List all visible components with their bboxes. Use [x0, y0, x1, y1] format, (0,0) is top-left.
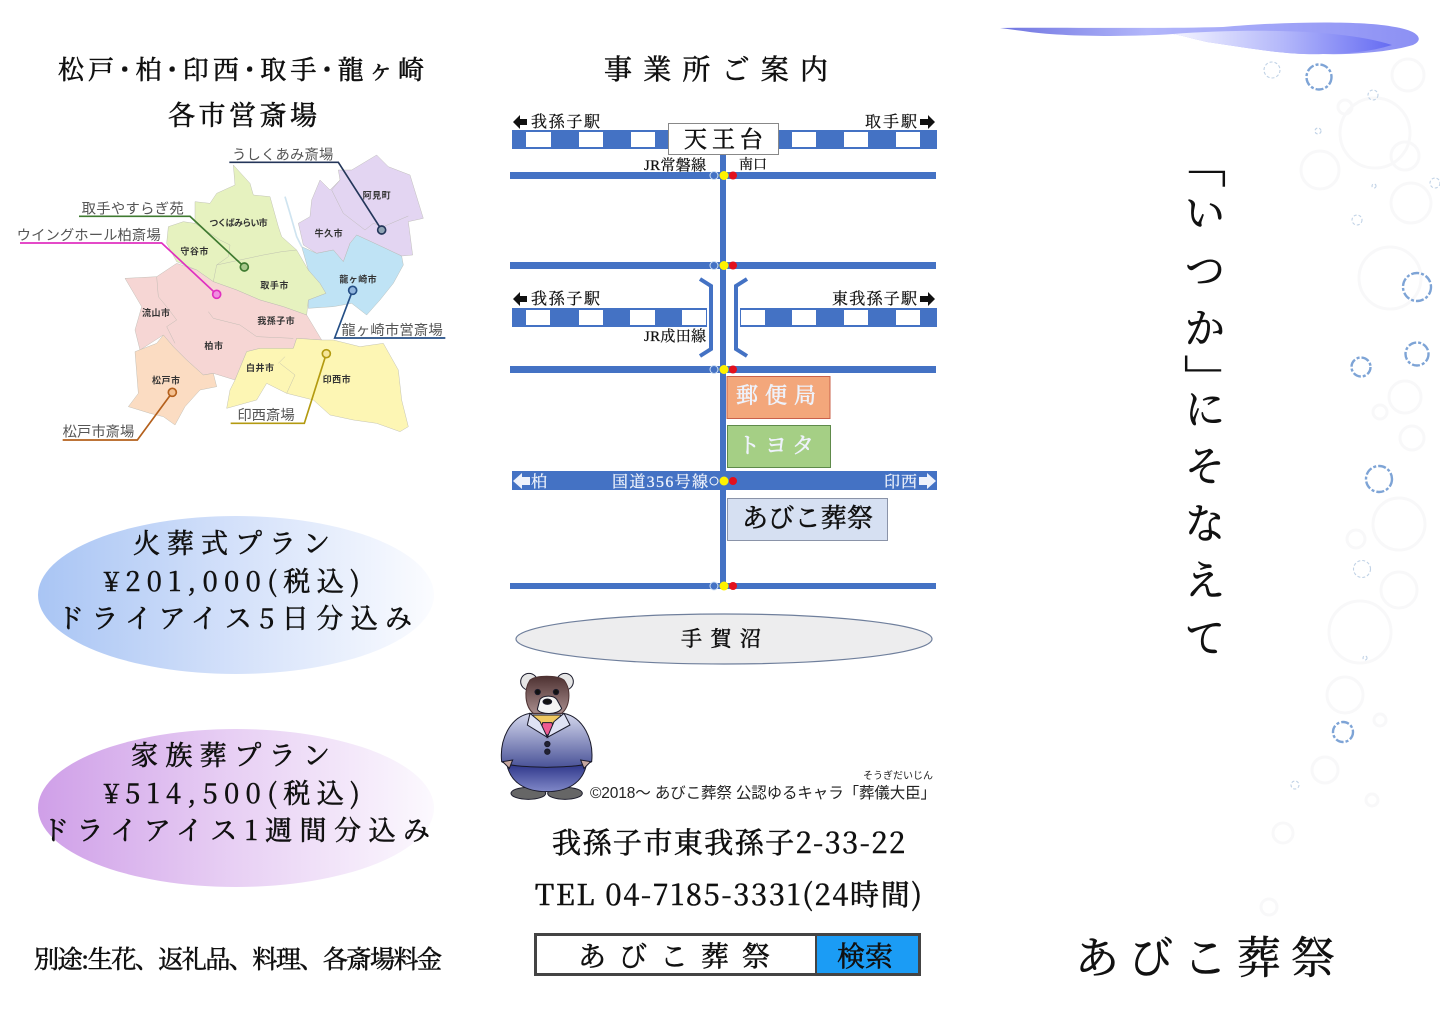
city names: 我孫子市: [257, 315, 295, 326]
label: うしくあみ斎場: [229, 147, 386, 234]
plan: family funeral: ドライアイス1週間分込み: [42, 809, 430, 848]
vertical tagline: 「: [1165, 138, 1237, 188]
label: 取手やすらぎ苑: 取手やすらぎ苑: [82, 200, 184, 217]
heading: crematoria: 松戸･柏･印西･取手･龍ヶ崎: [58, 50, 424, 87]
direction labels: JR成田線: [644, 328, 706, 345]
vertical tagline: いつか: [1175, 191, 1235, 364]
direction labels: 取手駅: [865, 109, 917, 132]
label: 印西斎場: [231, 350, 330, 424]
lake: 手賀沼: 手賀沼: [681, 623, 761, 653]
city names: 白井市: [246, 362, 274, 373]
city names: 取手市: [260, 280, 288, 291]
decorative bubbles: [1261, 59, 1440, 915]
city names: [142, 191, 391, 386]
city names: 阿見町: [363, 191, 391, 201]
landmark: Toyota: [728, 426, 830, 468]
telephone: TEL 04-7185-3331(24時間): [535, 873, 922, 914]
search box: 検索: [837, 935, 893, 975]
mascot: bear in suit: [501, 673, 592, 799]
city names: 牛久市: [315, 227, 343, 238]
landmark: Abiko Sosai: あびこ葬祭: [742, 498, 873, 535]
plan: cremation: 火葬式プラン: [133, 522, 330, 561]
city names: 印西市: [323, 373, 351, 384]
heading: office guide: 事業所ご案内: [604, 48, 828, 88]
label: うしくあみ斎場: うしくあみ斎場: [232, 147, 333, 164]
mascot caption: そうぎだいじん: [863, 769, 933, 782]
brand name: あびこ葬祭: [1075, 922, 1335, 986]
direction labels: JR常磐線: [644, 157, 706, 174]
city names: 柏市: [204, 340, 223, 351]
plan: family funeral: [38, 729, 434, 887]
mascot caption: [590, 769, 936, 802]
plan: cremation: [38, 516, 434, 674]
vertical tagline: [1165, 138, 1245, 673]
route 356 labels: 国道356号線: [612, 473, 708, 491]
city names: 流山市: [142, 307, 170, 318]
landmark: post office: [727, 376, 830, 418]
route map: [510, 109, 937, 664]
note: separate charges: 別途:生花、返礼品、料理、各斎場料金: [34, 940, 442, 976]
city names: 龍ヶ崎市: [339, 274, 377, 285]
city names: 守谷市: [180, 246, 208, 257]
search box: あびこ葬祭: [578, 935, 770, 975]
label: 印西斎場: 印西斎場: [237, 407, 295, 424]
heading: crematoria: 各市営斎場: [168, 94, 317, 133]
label: 龍ヶ崎市営斎場: 龍ヶ崎市営斎場: [341, 322, 443, 339]
direction labels: 我孫子駅: [531, 109, 600, 132]
label: 松戸市斎場: [63, 388, 176, 441]
roads: [510, 150, 937, 589]
address: 我孫子市東我孫子2-33-22: [552, 821, 905, 862]
heading: crematoria: [58, 50, 424, 133]
route 356 labels: 柏: [531, 469, 547, 492]
lake: 手賀沼: [516, 614, 932, 664]
plan: family funeral: ¥514,500(税込): [103, 772, 360, 811]
mascot caption: ©2018～ あびこ葬祭 公認ゆるキャラ「葬儀大臣」: [590, 784, 936, 802]
station: 天王台: 天王台: [684, 121, 763, 154]
search box: [536, 934, 920, 975]
city names: つくばみらい市: [209, 217, 268, 228]
plan: cremation: ¥201,000(税込): [103, 560, 360, 599]
vertical tagline: にそなえて: [1175, 387, 1235, 673]
direction labels: [513, 109, 935, 345]
map regions: [125, 155, 423, 432]
city names: 松戸市: [152, 375, 180, 386]
decorative swoosh: [1000, 22, 1419, 54]
map: city areas and crematoria: [17, 147, 445, 441]
direction labels: 東我孫子駅: [832, 286, 917, 309]
landmark: post office: 郵便局: [736, 379, 816, 410]
JR Joban line: [512, 130, 937, 149]
label: 龍ヶ崎市営斎場: [335, 286, 445, 339]
landmark: Toyota: トヨタ: [738, 429, 814, 460]
route 356 labels: [513, 469, 936, 492]
label: ウイングホール柏斎場: ウイングホール柏斎場: [17, 227, 161, 244]
plan: cremation: ドライアイス5日分込み: [57, 597, 412, 636]
traffic signals: [710, 171, 737, 590]
JR Narita line: [512, 279, 937, 356]
direction labels: 我孫子駅: [531, 286, 600, 309]
plan: family funeral: 家族葬プラン: [131, 734, 330, 773]
direction labels: 南口: [739, 154, 767, 174]
label: ウイングホール柏斎場: [17, 227, 221, 298]
vertical tagline: 」: [1173, 354, 1245, 404]
route 356 labels: 印西: [884, 469, 917, 492]
label: 松戸市斎場: 松戸市斎場: [63, 424, 134, 441]
label: 取手やすらぎ苑: [79, 200, 248, 271]
